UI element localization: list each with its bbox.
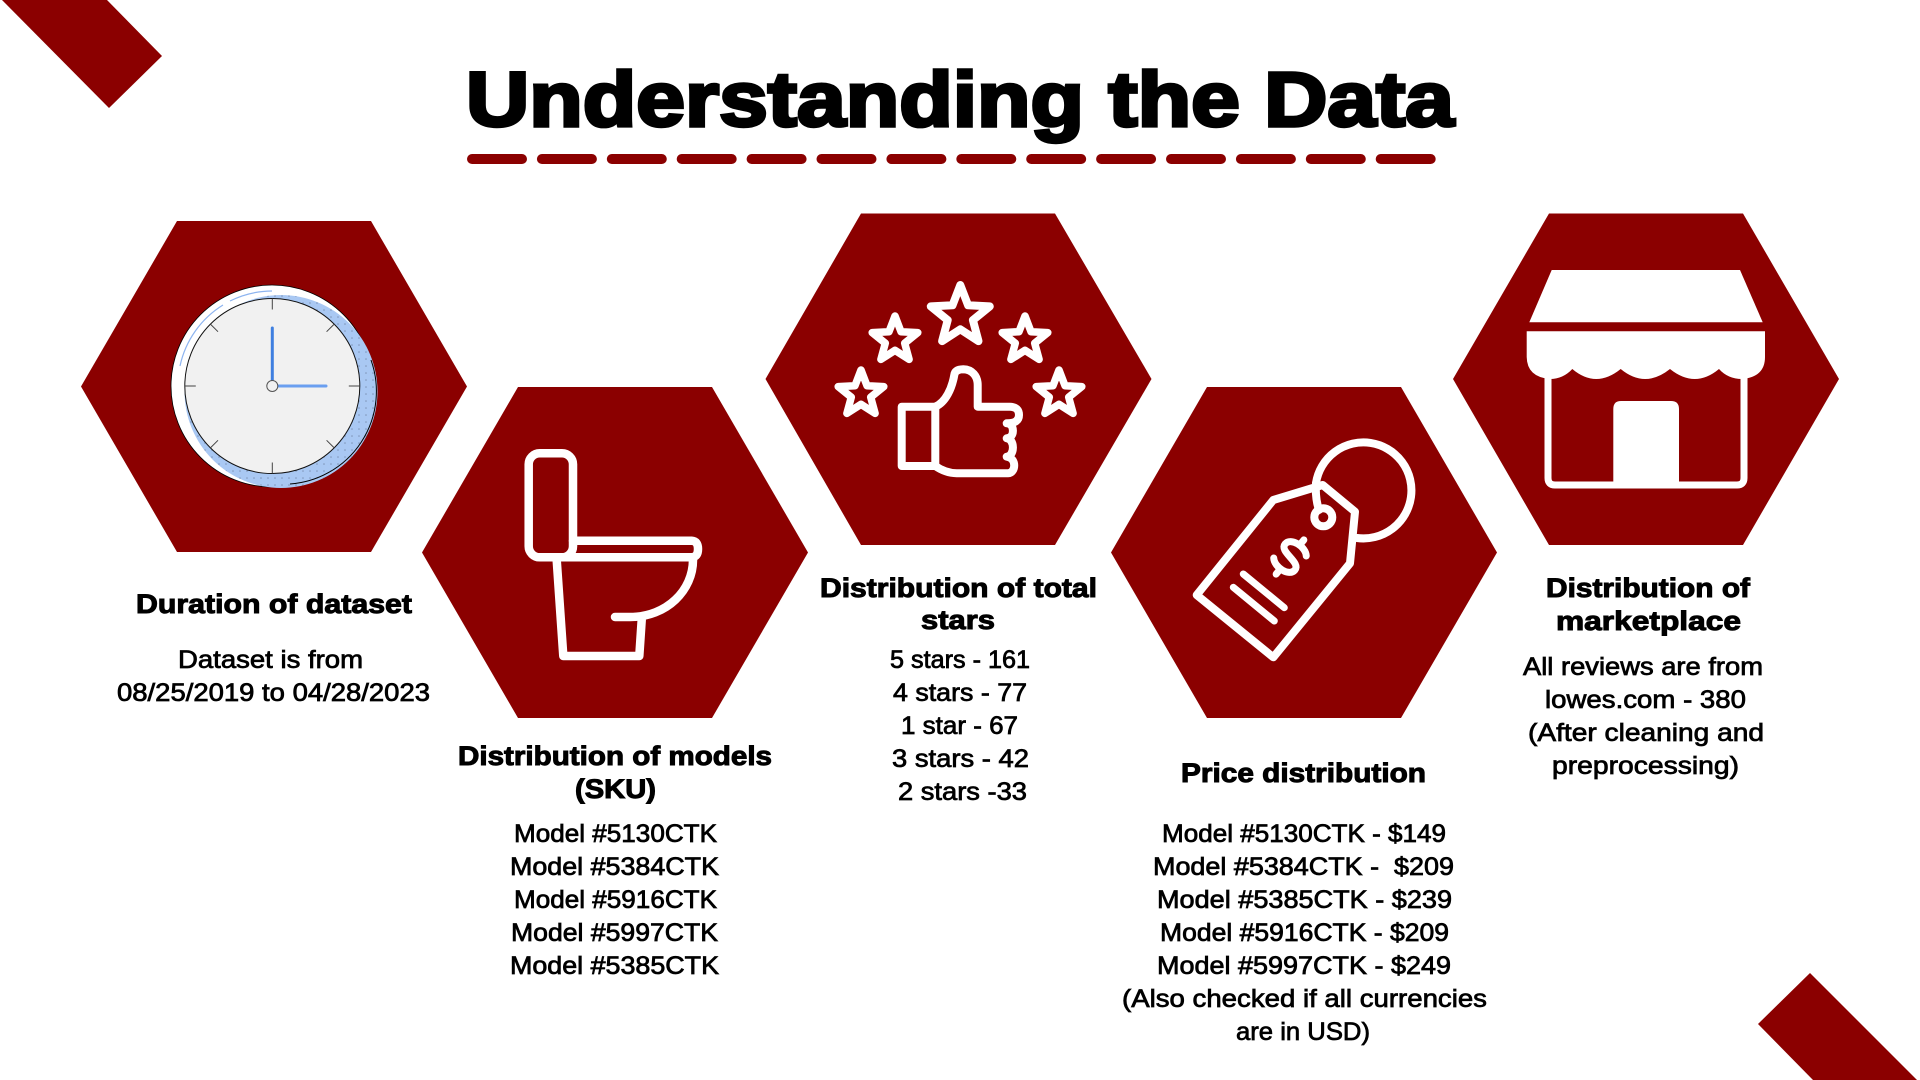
title: Understanding the Data — [466, 57, 1455, 143]
icon: price tag — [1197, 442, 1411, 657]
heading: stars: Distribution of total — [820, 573, 1097, 603]
hexagon: duration — [81, 221, 467, 552]
heading: marketplace: Distribution of — [1546, 573, 1751, 603]
heading: stars: stars — [921, 605, 995, 635]
heading: price: Price distribution — [1181, 758, 1426, 788]
hexagon: models — [422, 387, 808, 718]
text: marketplace details: (After cleaning and — [1528, 719, 1764, 747]
panel: distribution of total stars — [766, 214, 1152, 806]
text: duration details: Dataset is from — [178, 646, 363, 674]
text: price list: Model #5384CTK - $209 — [1153, 853, 1454, 881]
icon: clock — [171, 285, 378, 488]
heading: stars — [820, 573, 1097, 635]
corner accent: top left — [2, 0, 162, 108]
title dashed underline — [467, 154, 1436, 164]
text: price list: Model #5997CTK - $249 — [1157, 952, 1451, 980]
icon: toilet — [529, 453, 698, 656]
text: models list: Model #5916CTK — [514, 886, 717, 914]
text: duration details — [117, 646, 430, 707]
text: stars counts: 3 stars - 42 — [892, 745, 1029, 773]
text: price list: Model #5916CTK - $209 — [1160, 919, 1449, 947]
heading: models: Distribution of models — [458, 741, 772, 771]
text: price list: are in USD) — [1236, 1018, 1370, 1046]
hexagon: marketplace — [1453, 214, 1839, 545]
text: price list: Model #5130CTK - $149 — [1162, 820, 1446, 848]
panel: price distribution — [1111, 387, 1497, 1046]
text: price list: (Also checked if all currencies — [1122, 985, 1487, 1013]
text: marketplace details: preprocessing) — [1552, 752, 1739, 780]
icon: storefront — [1527, 270, 1765, 485]
text: models list: Model #5130CTK — [514, 820, 717, 848]
text: stars counts: 1 star - 67 — [901, 712, 1018, 740]
corner accent: bottom right — [1758, 973, 1917, 1080]
text: stars counts: 4 stars - 77 — [893, 679, 1027, 707]
text: price list — [1122, 820, 1487, 1046]
heading: models: (SKU) — [575, 774, 656, 804]
text: stars counts: 5 stars - 161 — [890, 646, 1030, 674]
text: marketplace details: All reviews are from — [1523, 653, 1763, 681]
icon: stars and thumbs up — [838, 285, 1082, 473]
panel: duration of dataset — [81, 221, 467, 707]
panel: distribution of marketplace — [1453, 214, 1839, 780]
text: models list — [510, 820, 719, 980]
text: models list: Model #5384CTK — [510, 853, 719, 881]
heading: marketplace: marketplace — [1556, 606, 1741, 636]
text: models list: Model #5385CTK — [510, 952, 719, 980]
heading: models — [458, 741, 772, 804]
heading: duration: Duration of dataset — [136, 589, 412, 619]
text: stars counts: 2 stars -33 — [898, 778, 1027, 806]
heading: marketplace — [1546, 573, 1751, 636]
text: marketplace details: lowes.com - 380 — [1545, 686, 1746, 714]
hexagon: stars — [766, 214, 1152, 545]
hexagon: price — [1111, 387, 1497, 718]
text: stars counts — [890, 646, 1030, 806]
text: price list: Model #5385CTK - $239 — [1157, 886, 1452, 914]
panel: distribution of models — [422, 387, 808, 980]
text: marketplace details — [1523, 653, 1764, 780]
text: duration details: 08/25/2019 to 04/28/2023 — [117, 679, 430, 707]
text: models list: Model #5997CTK — [511, 919, 718, 947]
